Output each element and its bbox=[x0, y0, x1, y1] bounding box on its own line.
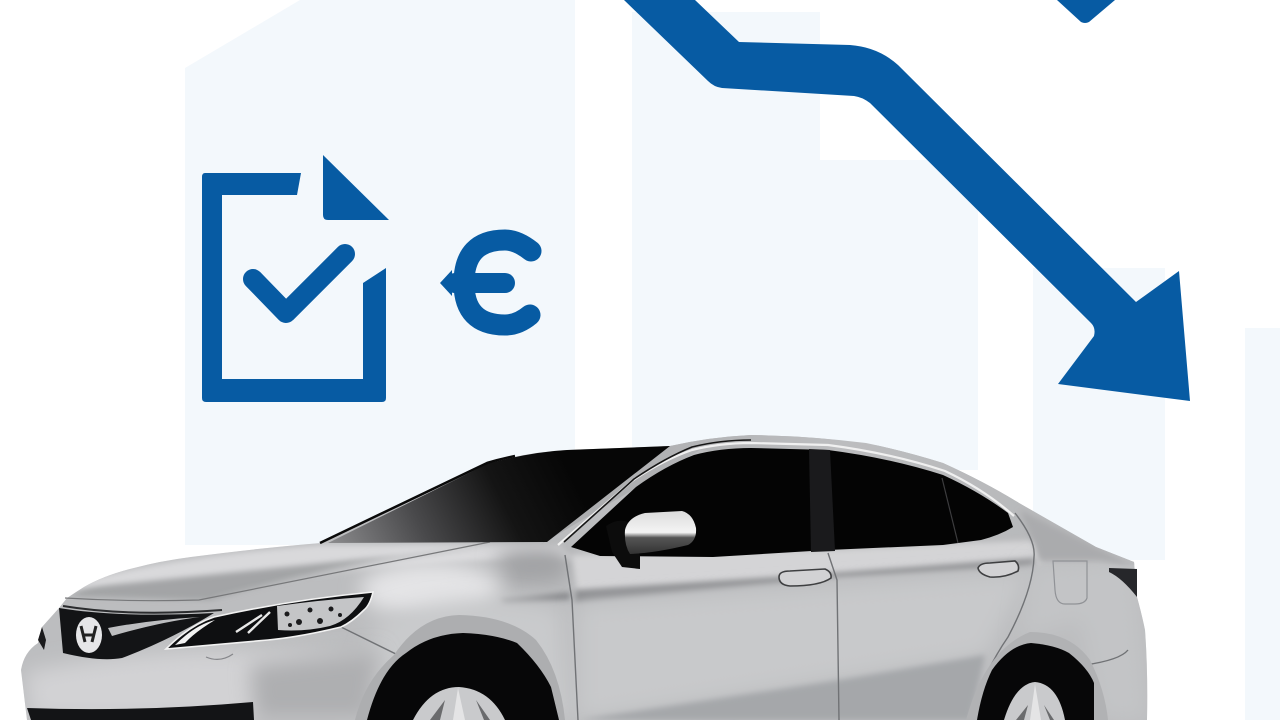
side windows bbox=[571, 448, 1013, 557]
window chrome bbox=[558, 443, 1014, 545]
rear panel bbox=[1028, 562, 1032, 566]
windshield bbox=[328, 446, 670, 543]
headlight bbox=[166, 592, 373, 649]
arrow: falling price trend bbox=[624, 0, 1190, 401]
rear wheel arch trim bbox=[966, 632, 1108, 720]
washer cap bbox=[206, 654, 233, 659]
front wheel arch and tyre bbox=[367, 633, 559, 720]
roof bbox=[540, 430, 1140, 565]
front wheel rim bbox=[413, 687, 505, 720]
emblem bbox=[76, 617, 102, 653]
headlight daytime strip bbox=[175, 620, 215, 645]
tail light bbox=[1109, 568, 1137, 597]
front wheel arch trim bbox=[355, 615, 565, 720]
headlight stripes bbox=[236, 612, 270, 633]
belt crease bbox=[575, 558, 1035, 602]
door and panel seams bbox=[341, 513, 1128, 720]
icon: document with check mark bbox=[202, 155, 389, 402]
grille bbox=[59, 608, 214, 659]
hood shading bbox=[74, 558, 368, 601]
door handles bbox=[779, 569, 831, 586]
mirror bbox=[625, 511, 696, 554]
b-pillar bbox=[809, 449, 835, 552]
door upper area bbox=[572, 540, 1040, 597]
hood crease line bbox=[65, 542, 490, 601]
headlight lamp cluster bbox=[277, 597, 364, 630]
rear wheel arch and tyre bbox=[977, 643, 1094, 720]
fender highlight bbox=[360, 562, 500, 618]
front vent bbox=[38, 627, 46, 650]
lower bumper vent bbox=[27, 702, 254, 720]
quarter divider bbox=[942, 478, 958, 543]
fuel flap bbox=[1053, 561, 1087, 604]
icon: euro symbol bbox=[440, 240, 531, 325]
grille top bar bbox=[63, 606, 222, 613]
window chrome dark line bbox=[564, 440, 751, 542]
windshield top edge bbox=[320, 456, 515, 543]
bumper shading bbox=[24, 647, 306, 720]
rear wheel rim bbox=[1004, 682, 1065, 720]
grille highlight bbox=[108, 617, 200, 636]
car body shading bbox=[21, 435, 1148, 720]
door lower light and dark bbox=[578, 572, 1030, 720]
mirror stalk bbox=[606, 521, 640, 569]
car: silver sedan bbox=[21, 435, 1148, 720]
